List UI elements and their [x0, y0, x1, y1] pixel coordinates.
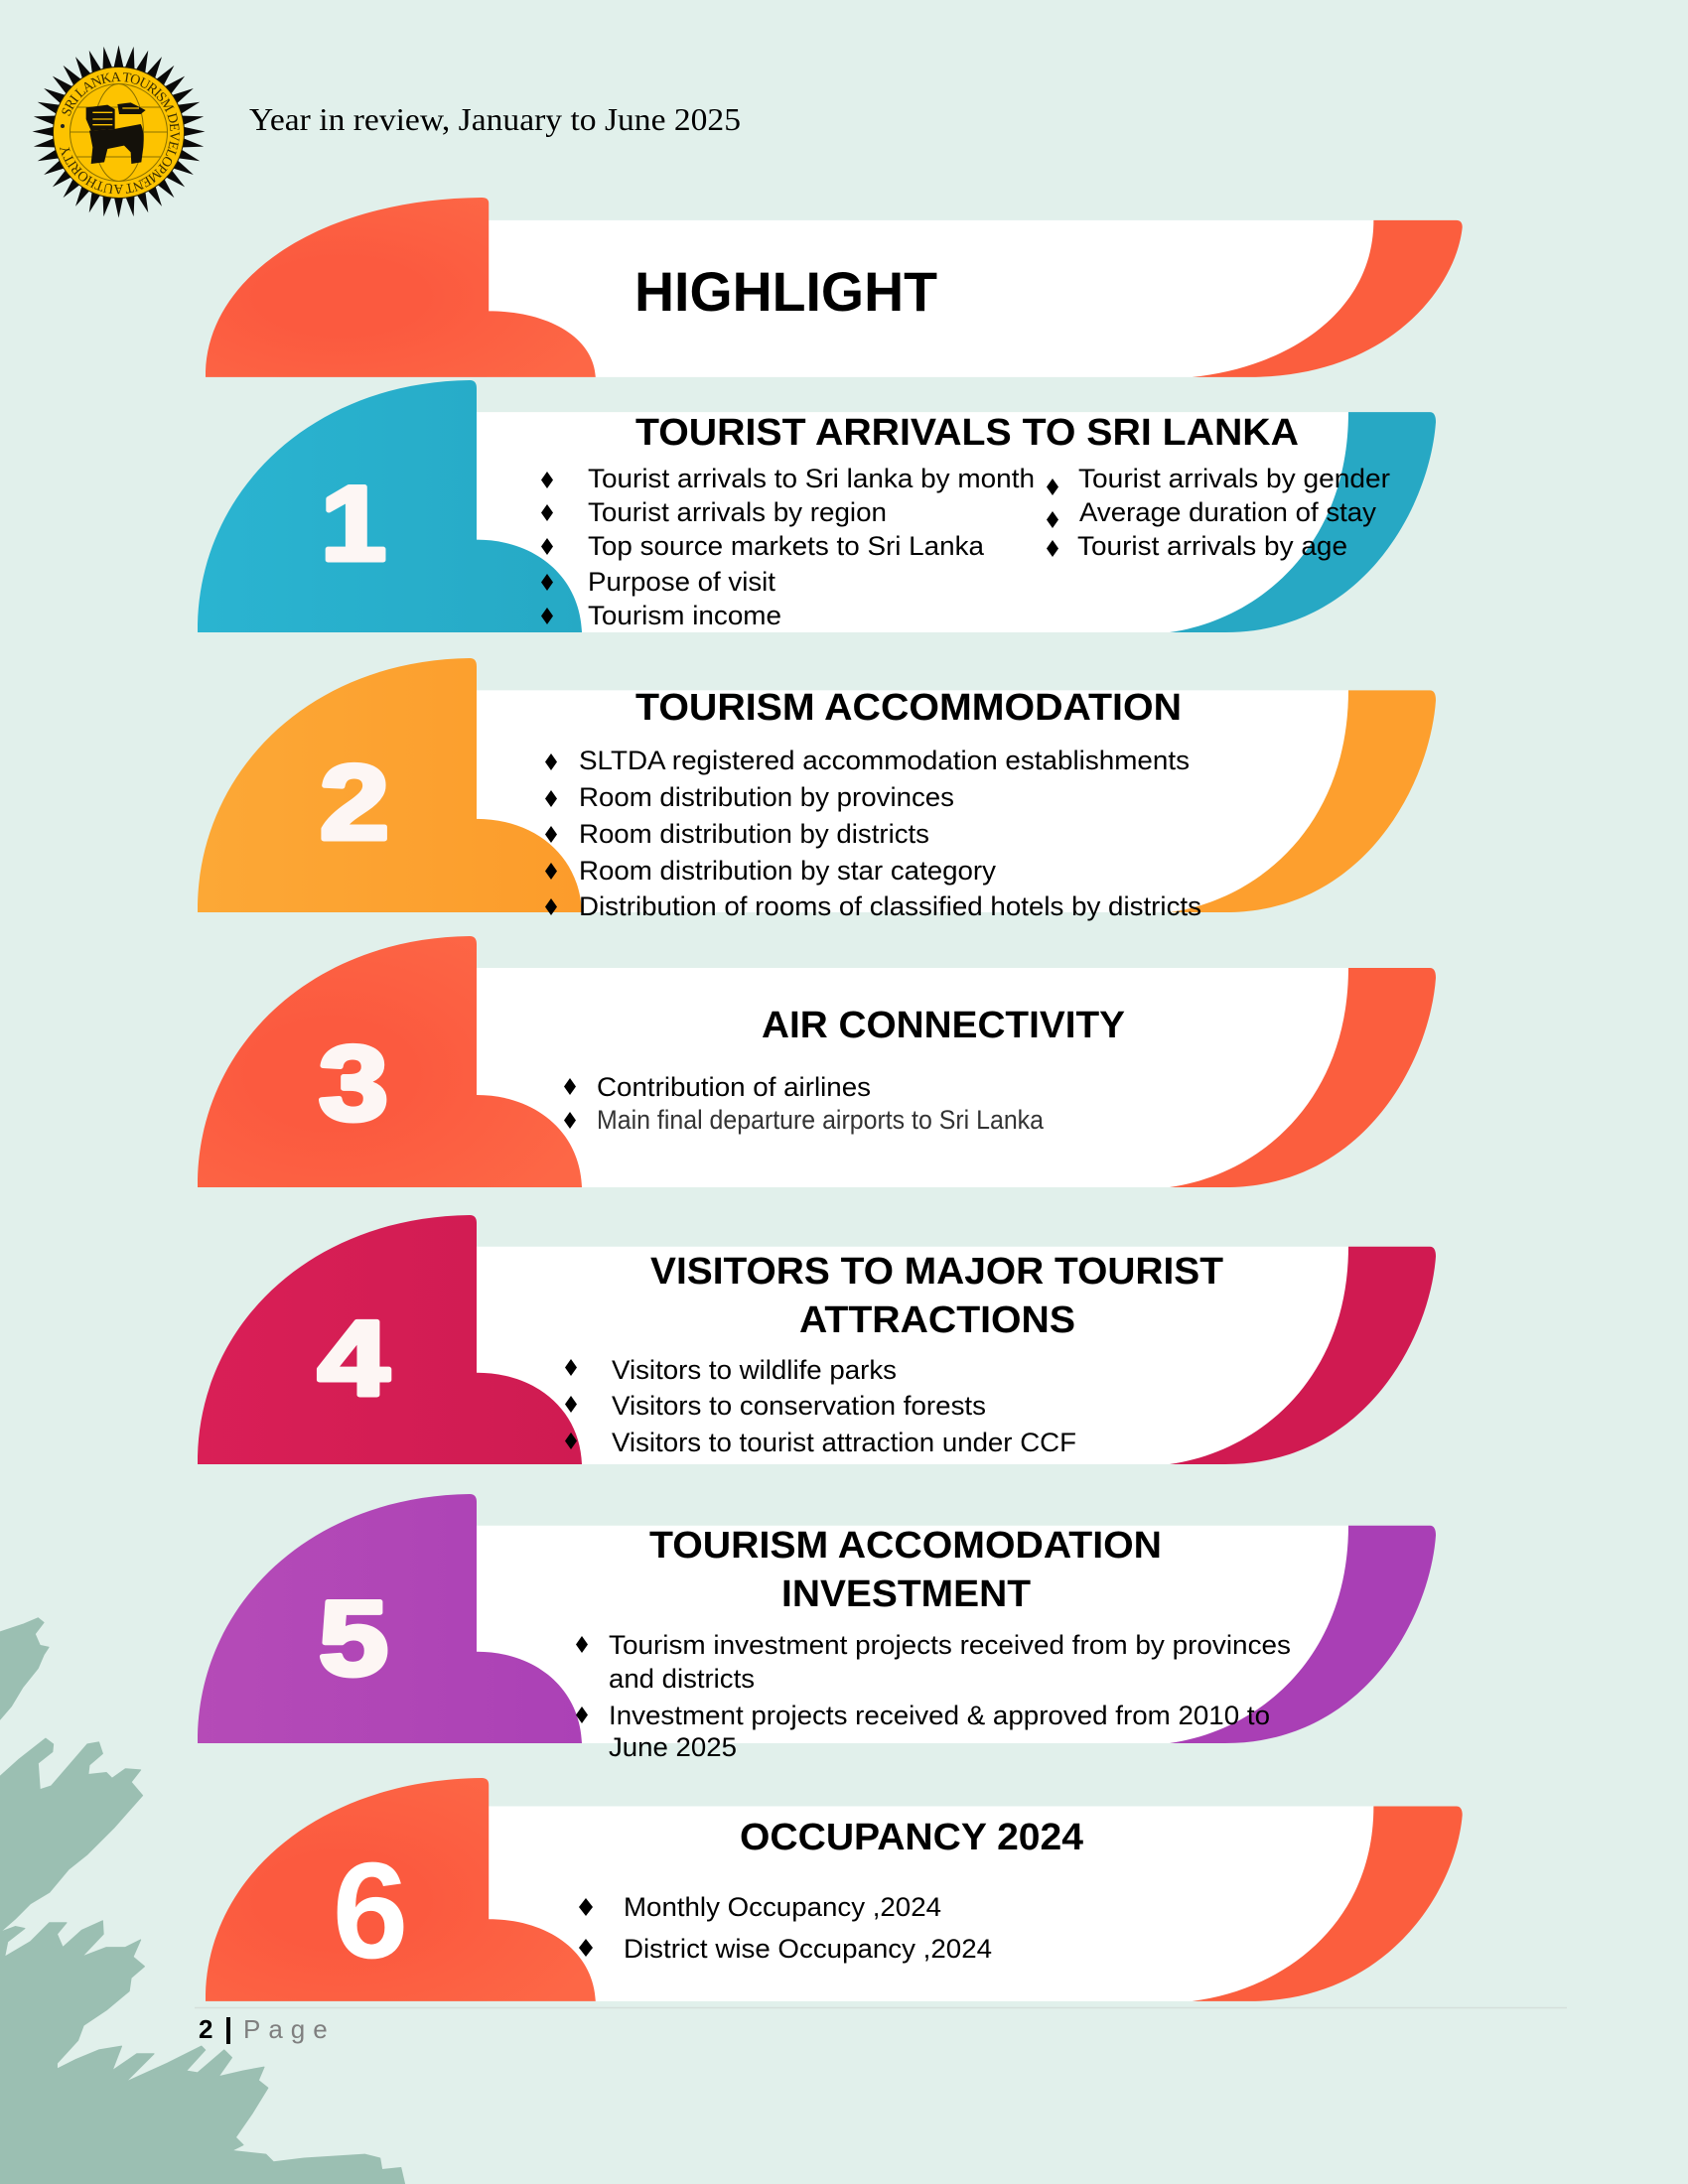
- bullet list: air connectivity: Contribution of airlines: [597, 1072, 871, 1102]
- heading: tourism accomodation investment: TOURISM ACCOMODATION: [649, 1525, 1162, 1567]
- bullet list: investment: Tourism investment projects received from by provinces: [609, 1630, 1291, 1660]
- panel: occupancy 2024: [206, 1778, 1463, 2001]
- bullet list: visitors: Visitors to tourist attraction under CCF: [612, 1428, 1076, 1457]
- bullet list: accommodation: Distribution of rooms of classified hotels by districts: [579, 891, 1201, 921]
- bullet list: tourist arrivals: Tourist arrivals by region: [588, 497, 887, 527]
- bullet list: tourist arrivals: Tourist arrivals by age: [1077, 531, 1347, 561]
- bullet list: occupancy: Monthly Occupancy ,2024: [624, 1892, 941, 1922]
- bullet list: tourist arrivals: Tourist arrivals to Sri lanka by month: [588, 464, 1035, 493]
- bullet list: tourist arrivals: Tourism income: [588, 601, 781, 630]
- bullet list: accommodation: SLTDA registered accommodation establishments: [579, 746, 1190, 775]
- bullet list: tourist arrivals: Average duration of stay: [1079, 497, 1376, 527]
- heading: air connectivity: AIR CONNECTIVITY: [762, 1005, 1125, 1046]
- bullet list: investment: June 2025: [609, 1732, 737, 1762]
- banner shape: highlight: [206, 198, 1463, 377]
- bullet list: accommodation: Room distribution by star category: [579, 856, 997, 886]
- bullet list: occupancy: [579, 1892, 992, 1964]
- panel: visitors to major tourist attractions: [198, 1215, 1436, 1464]
- heading: visitors to major tourist attractions: ATTRACTIONS: [799, 1299, 1075, 1341]
- bullet list: occupancy: District wise Occupancy ,2024: [624, 1934, 992, 1964]
- bullet list: visitors: Visitors to conservation forests: [612, 1391, 986, 1421]
- number 4: 4: [318, 1298, 389, 1418]
- bullet list: tourist arrivals: [541, 464, 1390, 630]
- bullet list: tourist arrivals: Top source markets to Sri Lanka: [588, 531, 985, 561]
- number 5: 5: [319, 1578, 388, 1698]
- number 2: 2: [320, 743, 389, 862]
- bullet list: air connectivity: [564, 1072, 1045, 1135]
- heading: visitors to major tourist attractions: VISITORS TO MAJOR TOURIST: [650, 1251, 1223, 1293]
- number 6: 6: [333, 1835, 408, 1987]
- panel: highlight banner: [206, 198, 1463, 377]
- bullet list: air connectivity: Main final departure airports to Sri Lanka: [597, 1105, 1045, 1135]
- bullet list: investment: and districts: [609, 1664, 755, 1694]
- header text: Year in review, January to June 2025: [249, 101, 741, 137]
- heading: tourism accommodation: TOURISM ACCOMMODATION: [635, 687, 1182, 729]
- banner shape: blue: [198, 380, 1436, 632]
- heading: occupancy: OCCUPANCY 2024: [740, 1817, 1083, 1858]
- panel: tourist arrivals: [198, 380, 1436, 632]
- bullet list: accommodation: Room distribution by districts: [579, 819, 929, 849]
- decorative island map: [0, 1618, 405, 2184]
- banner shape: coral: [198, 936, 1436, 1187]
- banner shape: purple: [198, 1494, 1436, 1743]
- heading: visitors to major tourist attractions: [650, 1251, 1223, 1341]
- panel: air connectivity: [198, 936, 1436, 1187]
- footer: page number: Page: [243, 2014, 336, 2044]
- logo: Sri Lanka Tourism Development Authority emblem: [32, 46, 205, 218]
- bullet list: visitors: [565, 1355, 1076, 1457]
- heading: tourism accomodation investment: [649, 1525, 1162, 1615]
- heading: tourism accomodation investment: INVESTMENT: [781, 1573, 1031, 1615]
- bullet list: investment: [576, 1630, 1291, 1762]
- panel: tourism accommodation: [198, 658, 1436, 921]
- bullet list: investment: Investment projects received & approved from 2010 to: [609, 1701, 1270, 1730]
- bullet list: tourist arrivals: Tourist arrivals by gender: [1078, 464, 1390, 493]
- number 3: 3: [319, 1024, 388, 1143]
- banner shape: orange: [198, 658, 1436, 912]
- bullet list: accommodation: Room distribution by provinces: [579, 782, 954, 812]
- footer: page number: 2: [199, 2014, 212, 2044]
- bullet list: tourist arrivals: Purpose of visit: [588, 567, 775, 597]
- logo: Sri Lanka Tourism Development Authority emblem: SRI LANKA TOURISM DEVELOPMENT AUTHORITY: [60, 71, 180, 195]
- banner shape: crimson: [198, 1215, 1436, 1464]
- heading: highlight: HIGHLIGHT: [634, 260, 937, 323]
- footer: page number: [199, 2014, 336, 2044]
- panel: tourism accommodation investment: [198, 1494, 1436, 1762]
- number 1: 1: [321, 464, 386, 583]
- banner shape: coral occupancy: [206, 1778, 1463, 2001]
- bullet list: accommodation: [545, 746, 1201, 921]
- bullet list: visitors: Visitors to wildlife parks: [612, 1355, 897, 1385]
- heading: tourist arrivals: TOURIST ARRIVALS TO SRI LANKA: [635, 412, 1299, 454]
